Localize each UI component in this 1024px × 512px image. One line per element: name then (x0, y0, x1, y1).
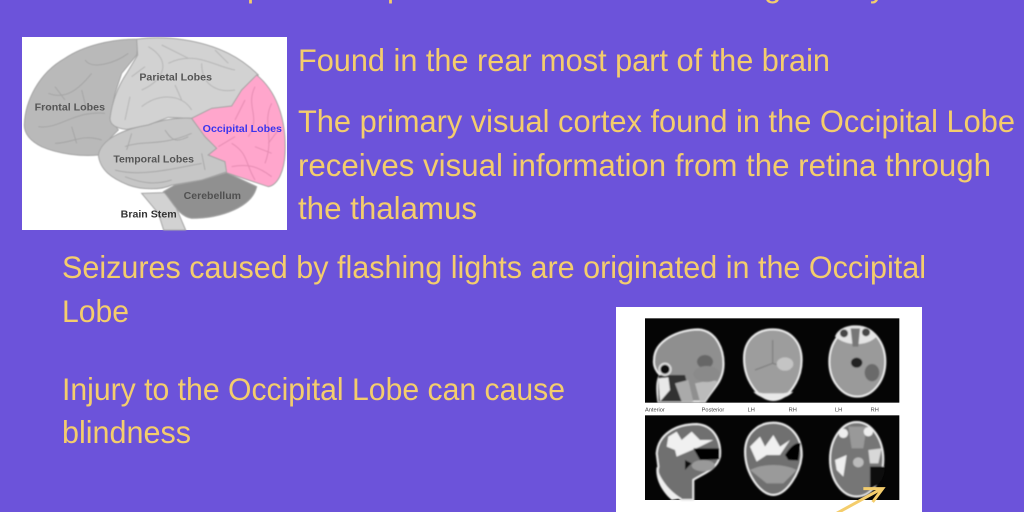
parietal lobe (110, 38, 258, 129)
cerebellum (163, 173, 257, 218)
MRI top row (645, 318, 899, 403)
brain labels: Cerebellum (184, 191, 241, 202)
text: primary visual cortex: receives visual information from the retina through (298, 147, 991, 183)
MRI view labels: Anterior (645, 408, 665, 414)
MRI scan figure (616, 307, 922, 512)
text: injury (62, 371, 565, 450)
text: primary visual cortex (298, 103, 1015, 226)
text: seizures (62, 249, 926, 329)
frontal lobe (24, 39, 139, 155)
MRI view labels: RH (871, 408, 879, 414)
brain labels: Frontal Lobes (35, 102, 105, 113)
text: injury: blindness (62, 414, 191, 450)
text: location: Found in the rear most part of the brain (298, 42, 830, 78)
text: seizures: Lobe (62, 293, 129, 329)
brain labels: Temporal Lobes (113, 155, 194, 166)
temporal lobe (98, 118, 227, 189)
brain labels: Occipital Lobes (203, 124, 282, 135)
brain diagram (22, 37, 287, 230)
text: primary visual cortex: The primary visual cortex found in the Occipital Lobe (298, 103, 1015, 139)
cropped heading: only descenders visible (247, 0, 886, 4)
MRI view labels: LH (748, 408, 755, 414)
text: injury: Injury to the Occipital Lobe can cause (62, 371, 565, 407)
MRI view labels: Posterior (702, 408, 724, 414)
MRI view labels: LH (835, 408, 842, 414)
brain stem (142, 193, 186, 230)
arrow pointing to lesion (837, 489, 883, 512)
MRI view labels: RH (789, 408, 797, 414)
occipital lobe (192, 75, 285, 187)
brain labels (35, 73, 282, 221)
MRI bottom row (645, 415, 899, 500)
MRI view labels (645, 408, 879, 414)
text: primary visual cortex: the thalamus (298, 190, 477, 226)
text: seizures: Seizures caused by flashing lights are originated in the Occipital (62, 249, 926, 285)
brain labels: Brain Stem (121, 210, 177, 221)
brain labels: Parietal Lobes (139, 73, 212, 84)
sulci (35, 45, 278, 183)
